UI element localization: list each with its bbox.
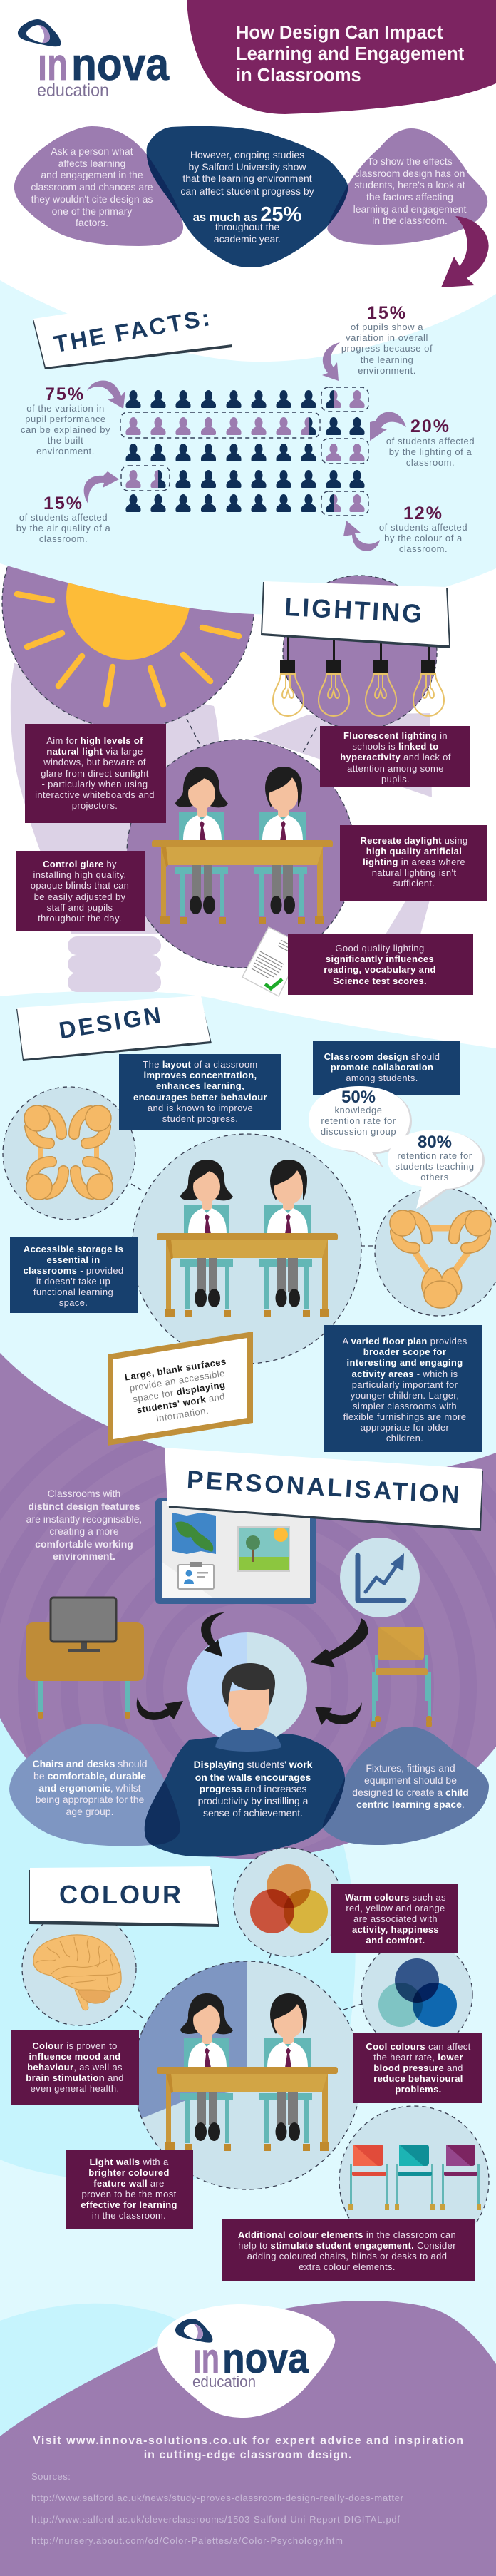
heading: design: DESIGN (57, 1001, 165, 1043)
text box: layout: The layout of a classroom (143, 1059, 258, 1070)
background: colour section tint (0, 1712, 356, 2184)
text box: layout: enhances learning, (156, 1080, 244, 1091)
icon: desk with monitor (26, 1598, 144, 1719)
header logo: education (37, 81, 109, 101)
pictogram: 50 pupils (120, 387, 368, 516)
speech bubble: 50%: retention rate for (321, 1115, 396, 1126)
text box: control glare: Control glare by (43, 859, 117, 869)
text box: light walls (66, 2150, 193, 2229)
text box: accessible storage (10, 1237, 138, 1313)
background: design to footer band (0, 991, 496, 2576)
icon: brain (33, 1935, 121, 2010)
intro bubble: centre: throughout the (215, 221, 279, 232)
bubble: displaying work: on the walls encourages (195, 1772, 311, 1783)
text box: collaboration: promote collaboration (331, 1062, 433, 1073)
text box: colour influence: brain stimulation and (26, 2072, 124, 2083)
fact: 75% built environment: can be explained by (21, 424, 110, 435)
intro bubble: centre: by Salford University show (189, 161, 306, 173)
text box: fluorescent lighting: hyperactivity and lack of (340, 752, 451, 762)
icon: three chairs around table (390, 1210, 491, 1308)
bubble: chairs and desks: be comfortable, durable (33, 1770, 146, 1782)
text box: warm colours: red, yellow and orange (346, 1903, 445, 1913)
text box: varied floor plan: interesting and engaging (347, 1357, 463, 1368)
design circle: right table (375, 1187, 496, 1316)
speech bubble: 80%: students teaching (395, 1161, 475, 1172)
text box: fluorescent lighting: Fluorescent lighting in (343, 730, 448, 741)
lighting students circle (127, 740, 355, 968)
footer logo blob (157, 2304, 335, 2418)
text box: colour influence: behaviour, as well as (27, 2062, 123, 2072)
text box: colour influence: Colour is proven to (32, 2040, 118, 2051)
fact: 75% built environment: environment. (36, 446, 95, 456)
footer sources (31, 2471, 404, 2546)
heading: the facts (33, 289, 232, 369)
text box: control glare (16, 851, 145, 931)
text box: colour influence: even general health. (31, 2083, 119, 2094)
fact: 75% built environment: the built (48, 435, 83, 446)
text box: varied floor plan (324, 1325, 482, 1452)
text box: layout: improves concentration, (143, 1070, 257, 1080)
header logo: in (38, 39, 68, 90)
text box: varied floor plan: appropriate for older (361, 1422, 450, 1433)
fact: 15% air quality: of students affected (19, 512, 108, 523)
intro bubble: right: the factors affecting (366, 191, 453, 203)
text box: control glare: be easily adjusted by (34, 891, 126, 902)
text box: cool colours: the heart rate, lower (373, 2052, 463, 2063)
fact: 15% learning environment: progress because of (341, 343, 433, 354)
fact: 15% learning environment: environment. (358, 365, 416, 376)
text box: layout: and is known to improve (148, 1103, 253, 1113)
text: distinct design features: Classrooms with (48, 1488, 120, 1499)
whiteboard: blank surfaces: space for displaying (132, 1379, 226, 1404)
intro bubble: left: affects learning (58, 158, 125, 169)
footer panel (0, 2301, 496, 2576)
arrow: chair to student (315, 1702, 362, 1725)
background: footer tint (0, 2304, 185, 2446)
text box: recreate daylight: Recreate daylight using (360, 835, 468, 846)
fact: 15% learning environment: 15% (367, 303, 407, 323)
icon: four chairs around table (24, 1105, 113, 1200)
icon: cool colour circles (378, 1958, 457, 2027)
text: distinct design features: are instantly recognisable, (26, 1513, 142, 1525)
text box: additional colour: Additional colour elements in the classroom can (238, 2229, 456, 2240)
intro bubble: left (14, 126, 183, 246)
bubble: displaying work (144, 1733, 345, 1857)
text box: natural light (25, 724, 166, 823)
students: colour (157, 1993, 338, 2151)
text box: varied floor plan: activity areas - which is (352, 1369, 458, 1379)
fact: 15% air quality (16, 494, 111, 544)
fact: 15% learning environment: variation in overall (346, 332, 428, 343)
bubble: displaying work: productivity by instilling a (198, 1795, 309, 1806)
lighting dashed connectors (187, 719, 316, 754)
footer logo blob: nova (222, 2335, 309, 2382)
speech bubble: 50% (309, 1086, 412, 1167)
bubble: fixtures and fittings: designed to create a child (352, 1787, 469, 1798)
text box: recreate daylight: lighting in areas where (363, 857, 465, 867)
text box: control glare: opaque blinds that can (31, 880, 129, 891)
text box: light walls: in the classroom. (92, 2210, 166, 2221)
icon: display board (155, 1498, 316, 1604)
text box: natural light: interactive whiteboards and (35, 789, 155, 800)
bubble: fixtures and fittings: equipment should be (364, 1774, 457, 1786)
text box: varied floor plan: A varied floor plan provides (342, 1336, 467, 1346)
title panel: Learning and Engagement (236, 44, 465, 64)
icon: hanging bulbs (273, 635, 444, 716)
text: distinct design features: distinct design features (28, 1501, 140, 1512)
heading: the facts: THE FACTS: (52, 304, 214, 357)
intro bubble: right: in the classroom. (372, 215, 448, 226)
bubble: fixtures and fittings: Fixtures, fittings and (366, 1762, 455, 1774)
intro bubble: left: classroom and chances are (31, 181, 153, 193)
text box: test scores: Science test scores. (333, 976, 427, 986)
text box: light walls: feature wall are (93, 2178, 165, 2189)
colour circle: coloured chairs (339, 2106, 489, 2256)
footer sources: Sources: (31, 2471, 71, 2482)
fact: 15% air quality: classroom. (39, 533, 88, 544)
text box: natural light: glare from direct sunlight (41, 768, 149, 779)
text box: varied floor plan: children. (386, 1433, 423, 1443)
text box: cool colours (353, 2033, 482, 2103)
text box: control glare: installing high quality, (33, 869, 127, 880)
intro bubble: centre: that the learning environment (182, 173, 312, 184)
text box: cool colours: blood pressure and (373, 2063, 463, 2073)
text box: warm colours: and comfort. (366, 1935, 425, 1946)
background: facts band (0, 280, 496, 615)
text box: control glare: staff and pupils (47, 902, 113, 913)
heading: colour (29, 1866, 219, 1927)
whiteboard: blank surfaces (108, 1332, 253, 1446)
speech bubble: 50%: 50% (341, 1088, 376, 1107)
intro bubble: right: learning and engagement (353, 203, 467, 215)
text: distinct design features: creating a more (49, 1525, 119, 1537)
icon: test paper with tick (242, 927, 304, 996)
intro bubble: right: To show the effects (367, 155, 453, 167)
colour dashed connectors (127, 1954, 362, 2020)
fact: 12% colour: classroom. (399, 543, 448, 554)
text box: accessible storage: space. (59, 1297, 88, 1308)
heading: lighting: LIGHTING (284, 592, 425, 628)
fact: 12% colour (379, 504, 467, 554)
text box: accessible storage: functional learning (33, 1287, 113, 1297)
text box: layout: encourages better behaviour (133, 1092, 267, 1103)
text: distinct design features: environment. (53, 1550, 115, 1562)
colour circle: brain (22, 1911, 136, 2025)
icon: chair (371, 1627, 432, 1727)
fact: 12% colour: of students affected (379, 522, 467, 533)
text box: fluorescent lighting: pupils. (381, 774, 410, 784)
whiteboard: blank surfaces: students' work and (136, 1391, 226, 1416)
bubble: displaying work: sense of achievement. (203, 1807, 303, 1819)
intro bubble: left: factors. (76, 217, 108, 228)
intro bubble: left: and engagement in the (41, 169, 143, 180)
text box: natural light: projectors. (72, 800, 118, 811)
heading: lighting (261, 581, 450, 648)
text box: colour influence: influence mood and (29, 2051, 121, 2062)
arrow: desk to student (137, 1697, 183, 1720)
text box: varied floor plan: broader scope for (363, 1346, 446, 1357)
arrow: 12% (343, 521, 380, 551)
whiteboard: blank surfaces: Large, blank surfaces (124, 1356, 227, 1383)
title panel: How Design Can Impact (236, 23, 443, 43)
bubble: chairs and desks: and ergonomic, whilst (38, 1782, 141, 1794)
bubble: chairs and desks: age group. (66, 1806, 113, 1817)
text box: accessible storage: classrooms - provided (23, 1265, 124, 1276)
colour students circle (133, 1961, 361, 2189)
text box: additional colour: extra colour elements. (299, 2261, 396, 2272)
text box: cool colours: reduce behavioural (373, 2073, 463, 2084)
text box: recreate daylight: sufficient. (393, 878, 435, 889)
personalisation purple backdrop (0, 1353, 496, 1859)
text box: collaboration (313, 1041, 460, 1095)
text box: warm colours: are associated with (353, 1913, 438, 1924)
speech bubble: 80%: others (420, 1172, 449, 1182)
fact: 20% lighting: of students affected (386, 436, 475, 446)
fact: 15% learning environment (341, 303, 433, 376)
text box: fluorescent lighting: schools is linked to (352, 741, 439, 752)
bubble: fixtures and fittings: centric learning space. (356, 1799, 465, 1810)
text box: varied floor plan: particularly important for (352, 1379, 458, 1390)
text box: test scores: significantly influences (326, 954, 434, 964)
intro bubble: left: they wouldn't cite design as (31, 193, 153, 205)
intro bubble: centre: as much as 25% (193, 203, 301, 226)
whiteboard: blank surfaces: information. (156, 1405, 210, 1424)
heading: colour: COLOUR (59, 1880, 183, 1909)
text box: control glare: throughout the day. (38, 913, 122, 924)
fact: 20% lighting (386, 416, 475, 468)
fact: 75% built environment: 75% (45, 384, 85, 404)
icon: three coloured chairs (348, 2145, 481, 2210)
text box: cool colours: problems. (395, 2084, 442, 2095)
intro bubble: left: one of the primary (52, 205, 132, 217)
colour circle: warm colours (234, 1848, 342, 1956)
footer sources: http://www.salford.ac.uk/cleverclassrooms/1503-Salford-Uni-Report-DIGITAL.pdf (31, 2514, 400, 2525)
text box: warm colours: Warm colours such as (345, 1892, 446, 1903)
bubble: chairs and desks: Chairs and desks should (32, 1758, 148, 1769)
fact: 15% learning environment: the learning (361, 354, 413, 365)
speech bubble: 50%: knowledge (334, 1105, 383, 1115)
fact: 12% colour: 12% (403, 504, 443, 523)
text box: light walls: effective for learning (81, 2199, 177, 2210)
fact: 15% learning environment: of pupils show a (351, 322, 423, 332)
text box: natural light: Aim for high levels of (46, 735, 143, 746)
icon: sun (1, 566, 254, 724)
text box: accessible storage: Accessible storage is (24, 1244, 123, 1254)
colour circle: cool colours (361, 1939, 472, 2050)
intro bubble: centre: academic year. (214, 233, 281, 245)
text box: colour influence (11, 2030, 139, 2105)
arrow: 15% learning environment (322, 342, 340, 381)
text box: collaboration: among students. (346, 1073, 418, 1083)
speech bubble: 80% (388, 1130, 485, 1210)
arrow: 75% (87, 380, 125, 409)
students: design (157, 1160, 338, 1317)
text box: natural light: windows, but beware of (43, 757, 146, 767)
text box: light walls: proven to be the most (81, 2189, 177, 2199)
fact: 15% air quality: 15% (43, 494, 83, 513)
heading: personalisation: PERSONALISATION (186, 1466, 463, 1509)
text box: light walls: brighter coloured (88, 2167, 170, 2178)
text box: light walls: Light walls with a (89, 2157, 169, 2167)
header logo: nova (71, 39, 169, 90)
bubble: displaying work: Displaying students' work (194, 1759, 313, 1770)
text box: varied floor plan: younger children. Larger, (351, 1390, 459, 1401)
text: distinct design features: comfortable working (35, 1538, 133, 1550)
lights circle (283, 576, 437, 730)
bubble: chairs and desks (9, 1724, 180, 1846)
text box: additional colour: adding coloured chairs, blinds or desks to add (247, 2251, 447, 2261)
footer logo blob: in (193, 2335, 219, 2382)
text box: accessible storage: essential in (46, 1254, 100, 1265)
intro bubble: centre: can affect student progress by (180, 185, 314, 197)
footer call to action: Visit www.innova-solutions.co.uk for expert advice and inspiration (33, 2435, 463, 2447)
arrow: graph to student (310, 1618, 368, 1667)
lighting backdrop: giant bulb silhouette (11, 663, 432, 992)
text box: test scores (288, 934, 473, 995)
text: distinct design features (26, 1488, 142, 1562)
text box: natural light: - particularly when using (42, 779, 148, 789)
design dashed connectors (131, 1184, 375, 1246)
text box: additional colour (222, 2219, 475, 2281)
text box: recreate daylight: high quality artificial (366, 846, 462, 857)
arrow: board to student (201, 1612, 224, 1657)
text box: warm colours: activity, happiness (352, 1924, 439, 1935)
footer call to action: in cutting-edge classroom design. (144, 2449, 352, 2461)
fact: 12% colour: by the colour of a (384, 533, 463, 543)
footer logo blob: education (192, 2373, 256, 2391)
text box: additional colour: help to stimulate student engagement. Consider (238, 2240, 456, 2251)
fact: 20% lighting: by the lighting of a (389, 446, 472, 457)
intro bubble: right (327, 128, 487, 245)
title panel (187, 0, 496, 114)
arrow: intro to facts (441, 216, 489, 287)
fact: 15% air quality: by the air quality of a (16, 523, 111, 533)
fact: 20% lighting: 20% (410, 416, 450, 436)
icon: student portrait (187, 1632, 307, 1752)
design students circle (132, 1134, 361, 1364)
intro bubble: right: classroom design has on (355, 168, 465, 179)
text box: fluorescent lighting (320, 726, 470, 787)
fact: 75% built environment: of the variation in (26, 403, 105, 414)
bubble: fixtures and fittings (323, 1727, 489, 1845)
bubble: displaying work: progress and increases (200, 1783, 306, 1794)
intro bubble: centre: However, ongoing studies (190, 149, 304, 160)
footer call to action (33, 2435, 463, 2461)
intro bubble: left: Ask a person what (51, 145, 133, 157)
text box: test scores: reading, vocabulary and (324, 964, 436, 975)
fact: 75% built environment: pupil performance (25, 414, 106, 424)
intro bubble: right: students, here's a look at (354, 179, 465, 190)
speech bubble: 50%: discussion group (321, 1126, 396, 1137)
bubble: chairs and desks: being appropriate for the (36, 1794, 144, 1805)
arrow: 15% air quality (84, 471, 119, 504)
header logo (18, 19, 169, 101)
footer sources: http://www.salford.ac.uk/news/study-proves-classroom-design-really-does-matter (31, 2493, 404, 2503)
title panel: in Classrooms (236, 66, 361, 86)
heading: design (16, 996, 212, 1061)
text box: accessible storage: it doesn't take up (36, 1276, 110, 1287)
text box: varied floor plan: flexible furnishings are more (343, 1411, 466, 1422)
whiteboard: blank surfaces: provide an accessible (129, 1368, 226, 1394)
icon: progress graph (340, 1538, 420, 1617)
fact: 75% built environment (21, 384, 110, 456)
footer sources: http://nursery.about.com/od/Color-Palettes/a/Color-Psychology.htm (31, 2535, 343, 2546)
heading: personalisation (165, 1448, 483, 1531)
text box: fluorescent lighting: attention among some (347, 763, 444, 774)
text box: layout (119, 1054, 281, 1130)
speech bubble: 80%: retention rate for (397, 1150, 472, 1161)
text box: test scores: Good quality lighting (335, 943, 425, 954)
students: lighting (152, 767, 333, 924)
arrow: 20% (370, 412, 406, 441)
text box: warm colours (331, 1884, 458, 1953)
intro bubble: centre (147, 126, 348, 267)
fact: 20% lighting: classroom. (406, 457, 455, 468)
text box: varied floor plan: simpler classrooms with (353, 1401, 457, 1411)
text box: collaboration: Classroom design should (324, 1051, 440, 1062)
design circle: left table (3, 1087, 135, 1220)
speech bubble: 80%: 80% (418, 1133, 452, 1152)
text box: recreate daylight: natural lighting isn't (372, 867, 456, 878)
text box: layout: student progress. (162, 1113, 238, 1124)
icon: warm colour circles (250, 1864, 328, 1933)
text box: recreate daylight (340, 825, 487, 901)
text box: cool colours: Cool colours can affect (366, 2041, 471, 2052)
text box: natural light: natural light via large (46, 746, 143, 757)
